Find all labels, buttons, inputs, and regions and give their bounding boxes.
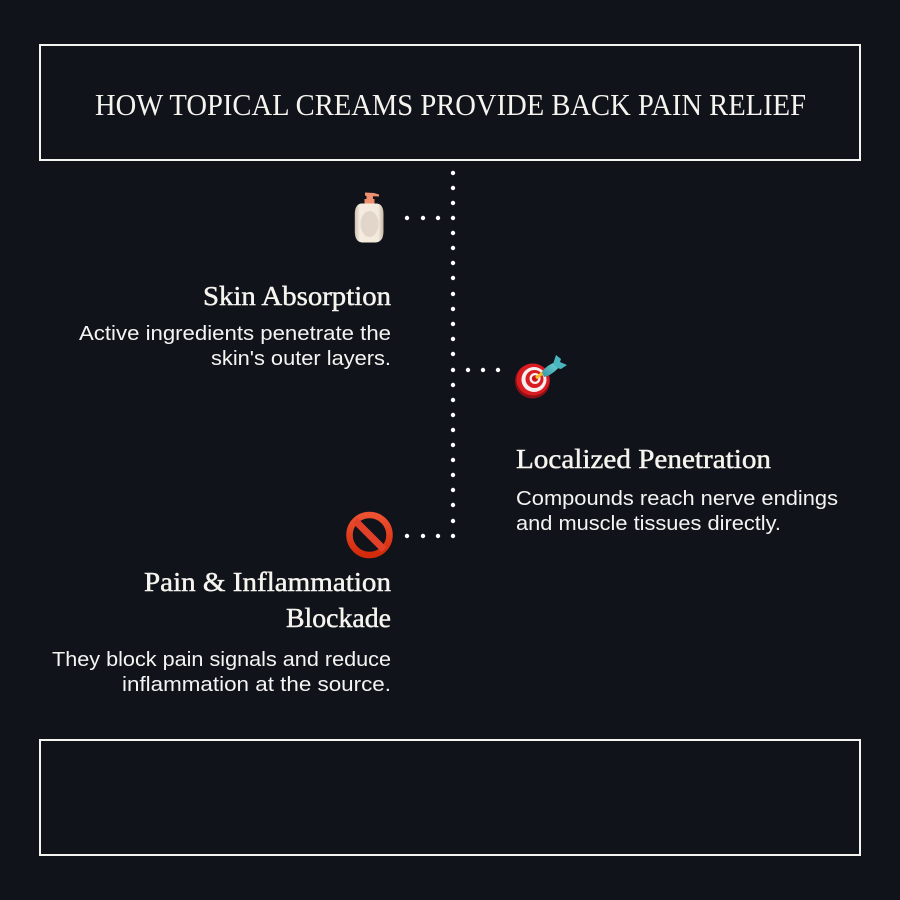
icon: lotion bottle [355,192,384,242]
description: pain and inflammation blockade [52,648,391,696]
icon: target with dart [515,355,567,398]
heading: skin absorption: Skin Absorption [203,281,392,311]
description: localized penetration: and muscle tissues directly. [516,512,781,535]
description: localized penetration [516,487,838,535]
description: pain and inflammation blockade: inflammation at the source. [122,673,391,696]
connector: skin absorption [405,216,440,220]
dotted vertical timeline [451,171,455,538]
heading: pain and inflammation blockade: Pain & Inflammation [144,567,392,597]
title box [40,45,860,160]
heading: pain and inflammation blockade: Blockade [286,603,391,633]
description: localized penetration: Compounds reach nerve endings [516,487,838,510]
heading: pain and inflammation blockade [144,567,392,633]
step 2 text: localized penetration [516,444,838,535]
connector: localized penetration [466,368,500,372]
step 3 text: pain and inflammation blockade [52,567,392,696]
title: HOW TOPICAL CREAMS PROVIDE BACK PAIN RELIEF [95,87,806,122]
description: pain and inflammation blockade: They block pain signals and reduce [52,648,391,671]
description: skin absorption: skin's outer layers. [211,347,391,370]
icon: prohibited sign [350,515,390,555]
description: skin absorption: Active ingredients penetrate the [79,322,391,345]
step 1 text: skin absorption [79,281,392,370]
footer box [40,740,860,855]
connector: blockade [405,534,440,538]
description: skin absorption [79,322,391,370]
heading: localized penetration: Localized Penetration [516,444,772,474]
